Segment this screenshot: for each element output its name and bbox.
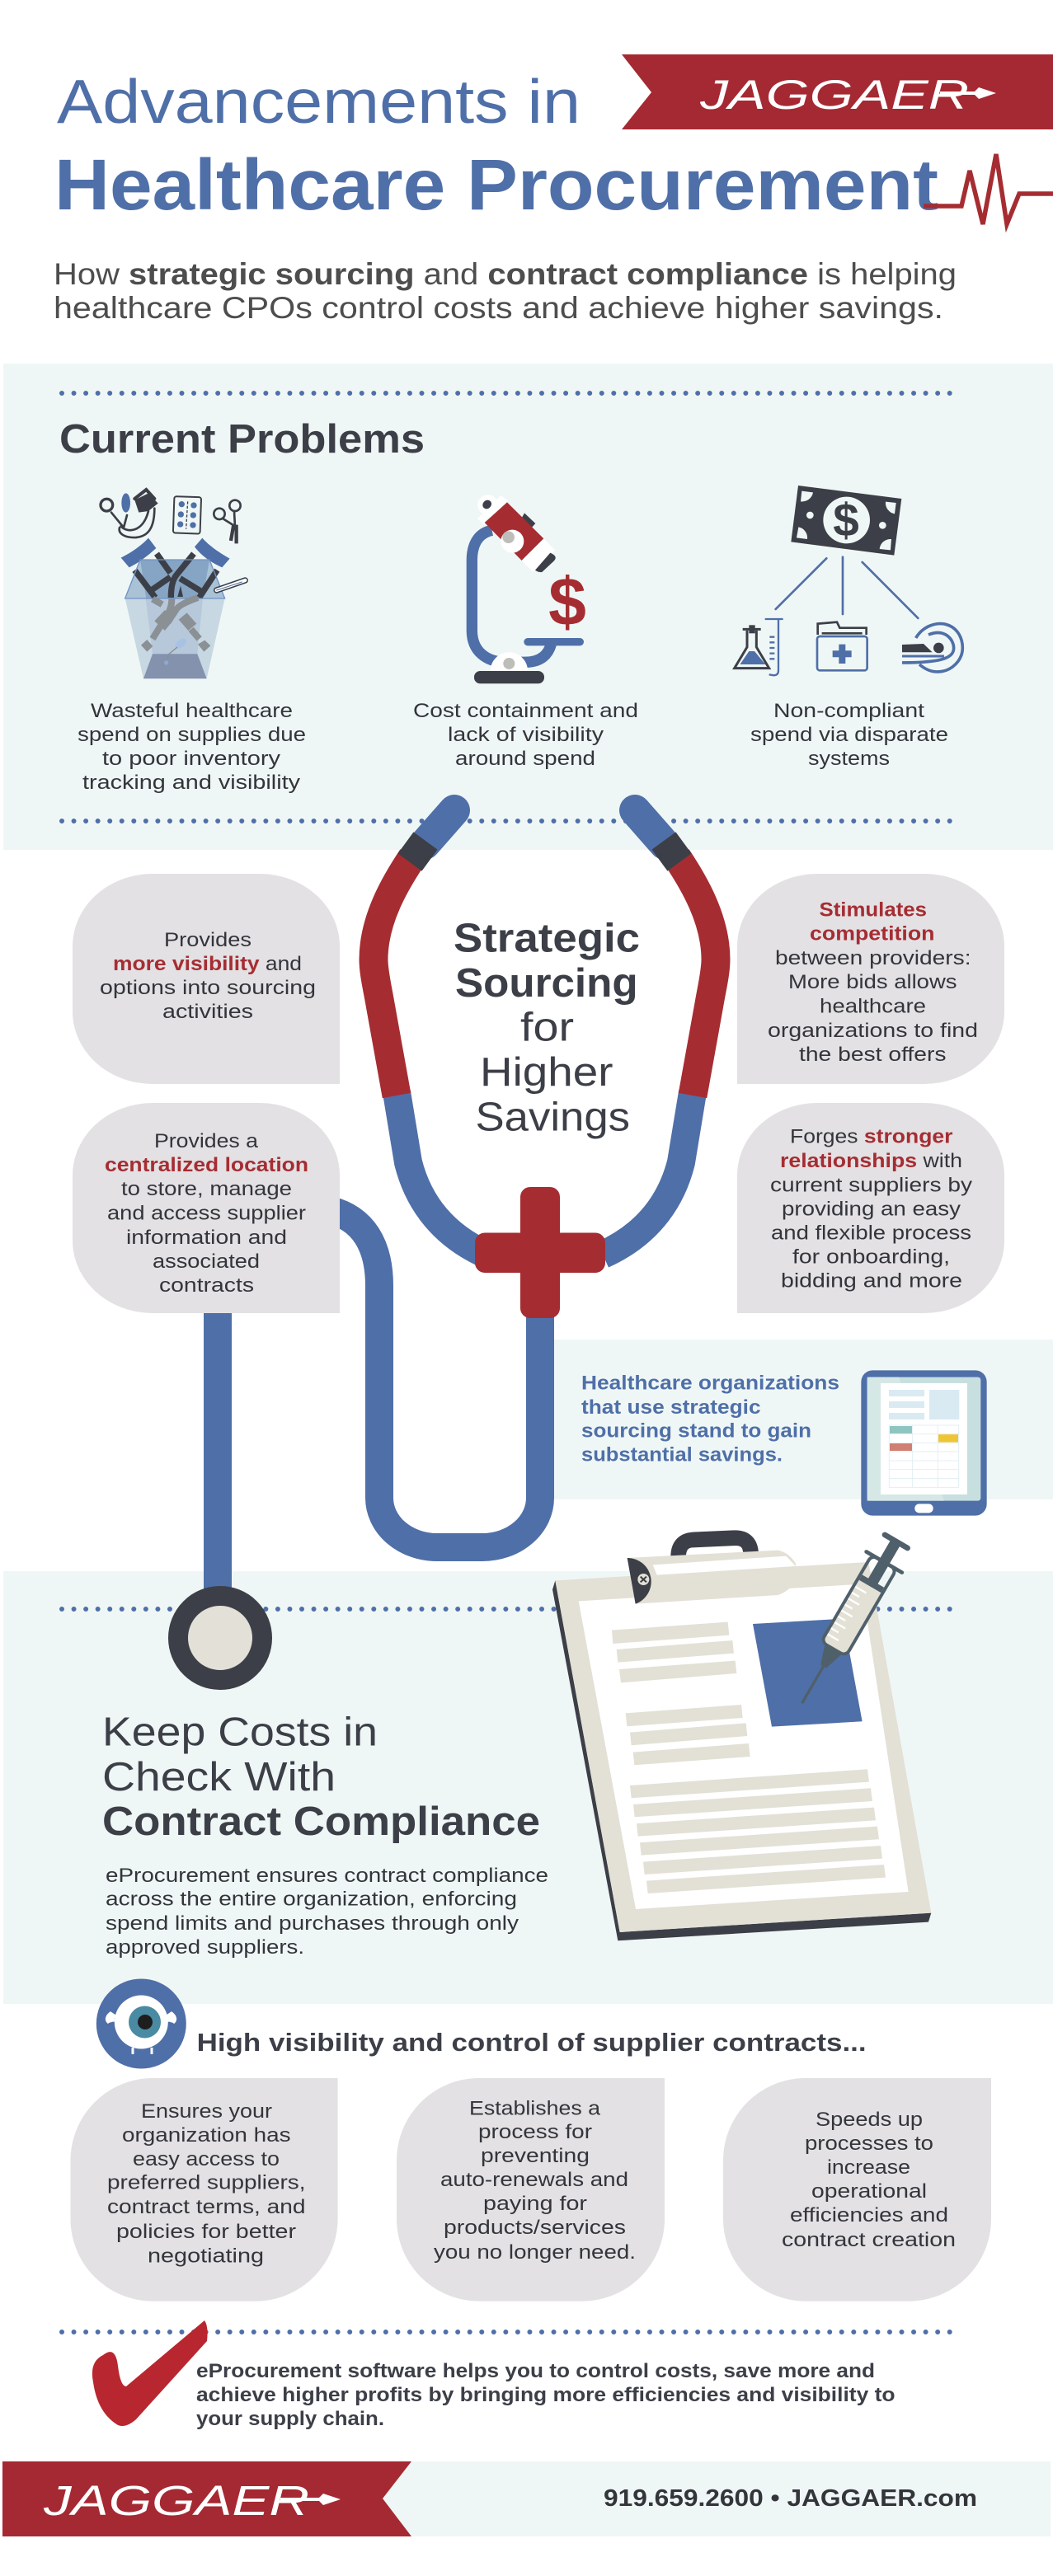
panel: prevent auto-renewals: products/services <box>444 2217 626 2239</box>
panel: stimulates competition: organizations to find <box>768 1020 978 1042</box>
panel: more visibility: options into sourcing <box>100 977 316 999</box>
icon: clipboard with syringe <box>552 1531 931 1940</box>
syringe <box>785 1531 914 1713</box>
heading: keep costs in check: Keep Costs in <box>102 1710 378 1755</box>
panel: prevent auto-renewals: preventing <box>481 2145 590 2167</box>
subtitle <box>54 257 957 325</box>
panel: stimulates competition <box>737 874 1004 1084</box>
panel: more visibility: activities <box>162 1001 253 1023</box>
heading: strategic sourcing for higher savings: Higher <box>480 1050 613 1095</box>
icon: ECG heartbeat line <box>924 154 1053 224</box>
icon: microscope with dollar sign <box>472 495 586 683</box>
panel: centralized location: Provides a <box>154 1130 259 1152</box>
text: non-compliant spend: spend via disparate <box>750 724 948 746</box>
text: eProcurement contract compliance <box>106 1865 548 1959</box>
callout: substantial savings: Healthcare organizations <box>581 1372 839 1395</box>
subtitle: healthcare CPOs control costs and achieve higher savings. <box>54 291 943 325</box>
connector lines <box>776 557 918 618</box>
text: eProcurement contract compliance: spend limits and purchases through only <box>106 1912 519 1935</box>
icon: scissors <box>214 500 241 543</box>
icon: money flowing to disparate systems <box>735 486 962 675</box>
panel: more visibility <box>73 874 340 1084</box>
icon: blister pack <box>173 496 201 534</box>
text: closing statement <box>196 2360 896 2430</box>
text: non-compliant spend: Non-compliant <box>773 700 924 722</box>
panel: more visibility: Provides <box>164 929 251 951</box>
text: eProcurement contract compliance: approved suppliers. <box>106 1936 304 1959</box>
panel: centralized location: contracts <box>159 1274 254 1297</box>
heading: current problems: Current Problems <box>59 417 425 462</box>
panel: stimulates competition: the best offers <box>799 1044 947 1066</box>
icon: blood pressure cuff <box>101 490 158 537</box>
panel: centralized location: and access supplier <box>107 1202 306 1225</box>
panel: prevent auto-renewals: Establishes a <box>469 2097 601 2120</box>
panel: stimulates competition: competition <box>810 923 935 945</box>
title: Advancements in <box>57 67 581 136</box>
panel: prevent auto-renewals: process for <box>478 2121 592 2143</box>
logo banner: footer: JAGGAER <box>43 2477 309 2524</box>
logo banner: footer <box>2 2461 411 2536</box>
text: wasteful spend: tracking and visibility <box>82 772 300 794</box>
text: closing statement: your supply chain. <box>196 2408 384 2430</box>
icon: flask and test tube <box>735 619 783 675</box>
icon: banknote: $ <box>833 495 859 547</box>
panel: stimulates competition: Stimulates <box>820 899 927 922</box>
document text bars <box>612 1622 886 1893</box>
panel: easy access: organization has <box>122 2124 291 2147</box>
panel: easy access: policies for better <box>116 2221 296 2243</box>
panel: stronger relationships: for onboarding, <box>792 1246 950 1269</box>
panel: centralized location: centralized location <box>105 1154 308 1176</box>
footer <box>2 2461 1051 2536</box>
contact details: 919.659.2600 • JAGGAER.com <box>604 2485 977 2512</box>
panel: operational efficiencies: processes to <box>805 2133 933 2155</box>
heading: strategic sourcing for higher savings <box>454 917 640 1139</box>
text: closing statement: achieve higher profits by bringing more efficiencies and visibility to <box>196 2384 896 2406</box>
icon: thermometer <box>217 580 245 590</box>
panel: easy access: easy access to <box>133 2148 280 2170</box>
text: non-compliant spend: systems <box>808 748 890 770</box>
panel: centralized location: associated <box>153 1250 260 1273</box>
panel: operational efficiencies: efficiencies and <box>790 2204 948 2226</box>
subtitle: How strategic sourcing and contract compliance is helping <box>54 257 957 291</box>
icon: medical folder <box>817 622 867 670</box>
panel: stimulates competition: healthcare <box>820 996 926 1018</box>
panel: stimulates competition: between providers: <box>775 947 971 969</box>
text: cost containment: Cost containment and <box>413 700 638 722</box>
panel: stronger relationships <box>737 1103 1004 1313</box>
text: wasteful spend <box>78 700 306 794</box>
text: cost containment: around spend <box>455 748 595 770</box>
crutches seen through bin <box>141 598 210 652</box>
panel: easy access <box>70 2078 338 2302</box>
panel: easy access: contract terms, and <box>107 2196 305 2218</box>
panel: operational efficiencies: contract creation <box>782 2229 956 2251</box>
document image block <box>753 1619 863 1727</box>
text: cost containment <box>413 700 638 770</box>
heading: strategic sourcing for higher savings: Savings <box>475 1095 630 1139</box>
stethoscope <box>178 810 716 1680</box>
heading: high visibility and control: High visibility and control of supplier contracts... <box>197 2028 867 2057</box>
icon: banknote <box>791 486 901 556</box>
panel: more visibility: more visibility and <box>113 953 302 975</box>
panel: operational efficiencies: increase <box>827 2156 910 2179</box>
panel: centralized location <box>73 1103 340 1313</box>
panel: stronger relationships: bidding and more <box>781 1270 962 1293</box>
bin back wall <box>125 560 225 598</box>
panel: prevent auto-renewals <box>397 2078 665 2302</box>
text: eProcurement contract compliance: eProcurement ensures contract compliance <box>106 1865 548 1887</box>
panel: prevent auto-renewals: you no longer need. <box>434 2241 636 2264</box>
panel: operational efficiencies: Speeds up <box>816 2109 923 2131</box>
callout: substantial savings: that use strategic <box>581 1396 761 1419</box>
panel: operational efficiencies <box>723 2078 991 2302</box>
bin front wall <box>125 598 225 678</box>
panel: current problems background <box>3 364 1053 850</box>
callout: substantial savings <box>581 1372 839 1466</box>
panel: easy access: negotiating <box>148 2245 264 2267</box>
text: closing statement: eProcurement software helps you to control costs, save more and <box>196 2360 875 2382</box>
panel: prevent auto-renewals: auto-renewals and <box>440 2169 628 2191</box>
text: cost containment: lack of visibility <box>448 724 604 746</box>
heading: strategic sourcing for higher savings: Strategic <box>454 917 640 961</box>
icon: medical supplies in waste bin <box>101 490 245 678</box>
heading: keep costs in check: Check With <box>102 1755 336 1799</box>
logo banner: top <box>622 54 1053 129</box>
panel: centralized location: to store, manage <box>121 1178 292 1200</box>
panel: stimulates competition: More bids allows <box>788 971 957 993</box>
callout: substantial savings: sourcing stand to gain <box>581 1420 811 1443</box>
crutches <box>121 538 230 598</box>
panel: stronger relationships: current suppliers by <box>770 1174 972 1197</box>
heading: keep costs in check: Contract Compliance <box>102 1799 540 1844</box>
heading: strategic sourcing for higher savings: Sourcing <box>455 961 638 1006</box>
panel: stronger relationships: providing an easy <box>782 1199 961 1220</box>
panel: savings callout background <box>554 1340 1053 1499</box>
panel: stronger relationships: and flexible process <box>771 1222 971 1245</box>
text: wasteful spend: Wasteful healthcare <box>91 700 293 722</box>
panel: easy access: Ensures your <box>141 2100 272 2123</box>
text: non-compliant spend <box>750 700 948 770</box>
heading: strategic sourcing for higher savings: for <box>520 1006 574 1050</box>
icon: red checkmark <box>92 2320 208 2426</box>
panel: easy access: preferred suppliers, <box>107 2172 305 2194</box>
text: eProcurement contract compliance: across the entire organization, enforcing <box>106 1889 517 1911</box>
panel: stronger relationships: relationships with <box>780 1150 962 1172</box>
title: Healthcare Procurement <box>54 145 938 225</box>
icon: flexing eye <box>96 1978 186 2069</box>
panel: stronger relationships: Forges stronger <box>790 1126 953 1148</box>
icon: tablet with spreadsheet <box>861 1370 987 1516</box>
panel: centralized location: information and <box>126 1227 287 1249</box>
text: wasteful spend: to poor inventory <box>102 748 280 770</box>
panel: operational efficiencies: operational <box>811 2180 927 2203</box>
panel: prevent auto-renewals: paying for <box>483 2193 587 2215</box>
clipboard clip <box>628 1551 796 1604</box>
icon: MRI scanner <box>902 624 962 672</box>
icon: pipette <box>164 636 188 665</box>
title <box>54 67 938 225</box>
heading: keep costs in check <box>102 1710 540 1844</box>
clipboard handle <box>679 1538 751 1556</box>
icon: microscope with dollar sign: $ <box>548 564 586 640</box>
callout: substantial savings: substantial savings. <box>581 1443 783 1466</box>
logo banner: top: JAGGAER <box>699 72 969 118</box>
text: wasteful spend: spend on supplies due <box>78 724 306 746</box>
clipboard board <box>552 1562 931 1940</box>
panel: contract compliance background <box>3 1571 1053 2004</box>
